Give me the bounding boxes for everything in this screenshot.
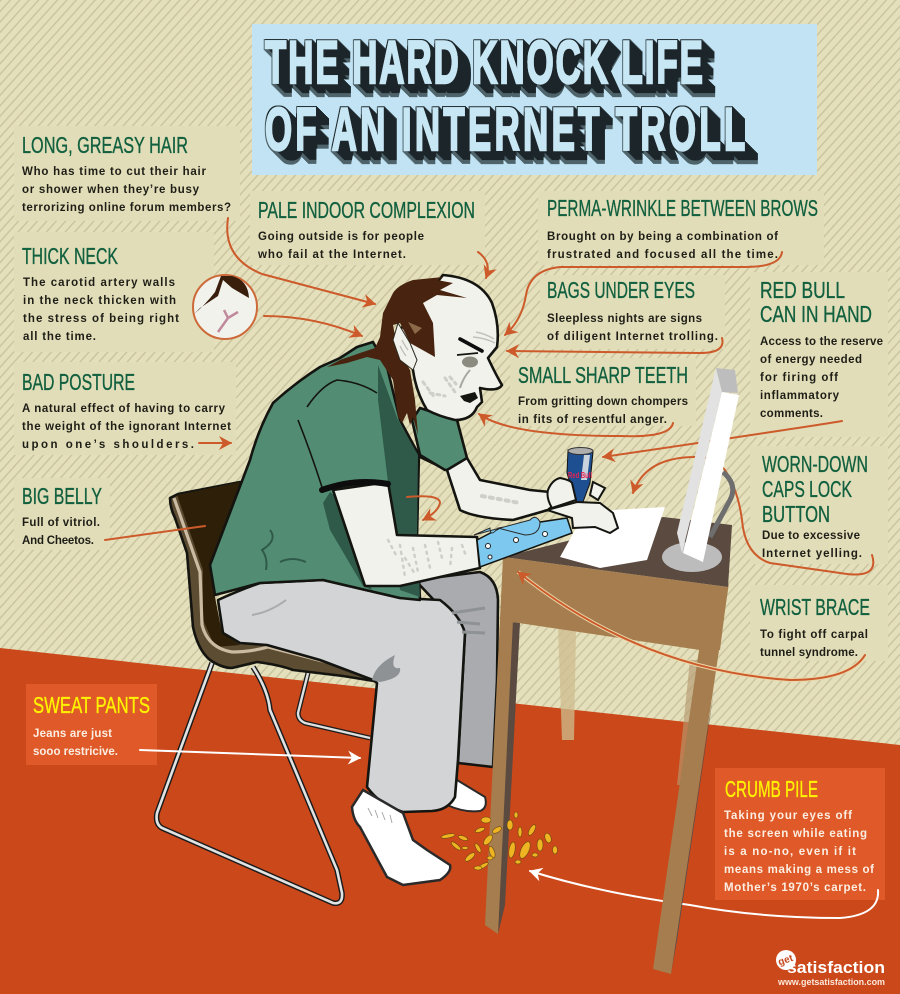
- artery: [218, 310, 238, 332]
- arrow: long greasy hair: [227, 218, 375, 304]
- desk right leg dark edge: [671, 690, 714, 974]
- pants fold: [372, 655, 400, 682]
- sleeve outline: [298, 380, 377, 487]
- panel: thick neck: [14, 232, 214, 352]
- desk left leg: [485, 557, 513, 934]
- near sock: [352, 790, 450, 885]
- near sleeve: [298, 380, 388, 490]
- shirt body: [210, 342, 467, 600]
- body text: Taking your eyes off: [724, 810, 852, 822]
- body text: [547, 313, 718, 343]
- monitor side: [677, 368, 722, 553]
- arrow: pale indoor complexion: [478, 252, 488, 278]
- body text: means making a mess of: [724, 864, 874, 876]
- illustration: chair: [157, 482, 380, 903]
- body text: Internet yelling.: [762, 548, 862, 560]
- keyboard: [560, 507, 665, 568]
- nose line: [460, 370, 470, 388]
- can label: Red Bull: [568, 471, 592, 480]
- panel: crumb pile: [715, 768, 885, 900]
- body text: A natural effect of having to carry: [22, 403, 226, 415]
- heading: SMALL SHARP TEETH: [518, 362, 688, 388]
- logo get: get: [777, 953, 795, 968]
- monitor stand base: [662, 542, 722, 572]
- body text: [257, 231, 424, 261]
- illustration: troll figure: [210, 275, 560, 885]
- monitor front: [683, 392, 739, 562]
- body text: of energy needed: [760, 354, 862, 366]
- pants fold far: [452, 608, 485, 633]
- arrow: sweat pants: [140, 750, 360, 758]
- body text: Who has time to cut their hair: [22, 166, 207, 178]
- chair back inner: [177, 482, 240, 647]
- arrow: big belly to stomach: [407, 496, 440, 520]
- monitor: [677, 368, 739, 562]
- head and neck: [400, 275, 502, 420]
- heading: THICK NECK: [22, 243, 118, 269]
- heading: SWEAT PANTS: [33, 692, 150, 718]
- arrow: bad posture: [199, 442, 231, 444]
- body text: or shower when they’re busy: [22, 184, 200, 196]
- panel: perma-wrinkle: [538, 191, 824, 265]
- body text: Due to excessive: [762, 530, 860, 542]
- monitor top: [716, 368, 738, 393]
- panel: pale indoor complexion: [250, 191, 485, 265]
- heading: BAGS UNDER EYES: [547, 277, 695, 303]
- body text: And Cheetos.: [22, 535, 94, 547]
- body text: Mother’s 1970’s carpet.: [724, 882, 866, 894]
- shirt shadow by arm: [323, 492, 372, 590]
- far sleeve: [412, 408, 467, 470]
- panel: bags under eyes: [540, 275, 725, 349]
- pants thigh crease: [252, 600, 286, 615]
- brace holes: [486, 532, 548, 559]
- panel: wrist brace: [750, 585, 888, 661]
- body text: [23, 277, 179, 343]
- body text: [724, 810, 874, 894]
- arrow: thick neck: [264, 316, 362, 336]
- eye bag: [462, 356, 478, 368]
- crumb pile: [441, 812, 558, 871]
- body text: sooo restricive.: [33, 746, 118, 758]
- body text: [760, 629, 868, 659]
- body text: frustrated and focused all the time.: [547, 249, 778, 261]
- body text: of diligent Internet trolling.: [547, 331, 718, 343]
- far arm hair: [482, 496, 520, 503]
- heading: PALE INDOOR COMPLEXION: [258, 197, 475, 223]
- body text: [762, 530, 862, 560]
- panel: red bull can in hand: [750, 272, 888, 437]
- carpet floor: [0, 648, 900, 994]
- panel: sweat pants: [26, 684, 157, 765]
- body text: Going outside is for people: [258, 231, 424, 243]
- near arm: [333, 482, 480, 586]
- shirt wrinkles: [262, 530, 306, 570]
- body text: upon one’s shoulders.: [22, 439, 194, 451]
- brow wrinkles: [473, 332, 495, 343]
- illustration: desk: [485, 472, 733, 974]
- arrow: red bull can: [603, 421, 842, 457]
- shirt dark front: [378, 365, 420, 597]
- sleeve band: [322, 482, 388, 490]
- body text: the stress of being right: [23, 313, 179, 325]
- eyebrow: [460, 339, 482, 351]
- heading: CRUMB PILE: [725, 776, 818, 802]
- arrow: crumb pile: [530, 871, 878, 918]
- title text with 3D extrusion: OF AN INTERNET TROLL: [265, 97, 745, 163]
- sock ribs: [368, 808, 392, 823]
- far arm: [447, 458, 560, 520]
- body text: in fits of resentful anger.: [518, 414, 667, 426]
- body text: for firing off: [760, 372, 838, 384]
- hair highlight: [408, 322, 422, 334]
- heading: BIG BELLY: [22, 483, 102, 509]
- title text with 3D extrusion: THE HARD KNOCK LIFE: [265, 30, 703, 96]
- desk left leg dark strip: [498, 622, 520, 934]
- eye: [457, 353, 478, 355]
- panel: long greasy hair: [14, 126, 240, 221]
- heading: RED BULL: [760, 277, 845, 303]
- desk top: [503, 517, 732, 587]
- title panel: [252, 24, 817, 175]
- body text: [547, 231, 778, 261]
- body text: To fight off carpal: [760, 629, 868, 641]
- chair shell: [170, 482, 380, 682]
- arrow: perma-wrinkle: [505, 252, 782, 335]
- hand on can: [548, 478, 605, 508]
- neck detail circle: [193, 275, 257, 339]
- ear detail: [400, 340, 408, 356]
- near leg: [218, 580, 465, 812]
- logo badge: [776, 950, 796, 970]
- brace strap: [474, 517, 540, 535]
- body text: [760, 336, 883, 420]
- heading line three: BUTTON: [762, 501, 830, 527]
- body text: [22, 166, 231, 214]
- body text: the screen while eating: [724, 828, 867, 840]
- heading line two: CAPS LOCK: [762, 476, 852, 502]
- logo url: www.getsatisfaction.com: [777, 977, 885, 988]
- mouth: [460, 392, 478, 403]
- arm hair stipple: [388, 540, 466, 577]
- arrow: wrist brace: [518, 572, 865, 680]
- desk right leg: [653, 583, 729, 974]
- body text: Brought on by being a combination of: [547, 231, 778, 243]
- body text: From gritting down chompers: [518, 396, 688, 408]
- arrow: small sharp teeth: [479, 414, 673, 436]
- title text with 3D extrusion: [265, 30, 745, 163]
- body text: Sleepless nights are signs: [547, 313, 702, 325]
- heading: BAD POSTURE: [22, 369, 135, 395]
- desk apron: [503, 557, 728, 650]
- chair tan edge: [174, 498, 330, 663]
- body text: [518, 396, 688, 426]
- can top: [568, 448, 593, 454]
- ear: [393, 323, 417, 370]
- arrow: caps lock button: [633, 457, 873, 575]
- panel: worn-down caps lock button: [750, 446, 888, 564]
- stubble: [423, 377, 456, 398]
- panel: big belly: [14, 478, 110, 550]
- body text: [22, 517, 100, 547]
- body text: all the time.: [23, 331, 96, 343]
- body text: [33, 728, 118, 758]
- hand on keyboard: [547, 502, 618, 533]
- far leg: [415, 572, 498, 767]
- chair front leg frame: [157, 663, 342, 903]
- hair: [327, 277, 467, 435]
- logo wordmark: satisfaction: [787, 958, 885, 977]
- back table legs: [558, 628, 698, 785]
- body text: comments.: [760, 408, 823, 420]
- red bull can: [567, 448, 593, 502]
- monitor cable: [710, 472, 733, 537]
- body text: inflammatory: [760, 390, 840, 402]
- arrow: big belly: [105, 526, 205, 540]
- can highlight: [581, 455, 590, 480]
- far sock: [447, 780, 486, 811]
- body text: The carotid artery walls: [23, 277, 175, 289]
- panel: bad posture: [14, 362, 236, 455]
- body text: is a no-no, even if it: [724, 846, 856, 858]
- hair in circle: [194, 276, 249, 314]
- body text: terrorizing online forum members?: [22, 202, 231, 214]
- panel: small sharp teeth: [510, 358, 696, 426]
- logo: get satisfaction: [776, 950, 885, 988]
- body text: [22, 403, 231, 451]
- brace: [474, 517, 572, 567]
- chair rear leg: [298, 673, 370, 738]
- body text: Jeans are just: [33, 728, 112, 740]
- body text: Full of vitriol.: [22, 517, 100, 529]
- body text: the weight of the ignorant Internet: [22, 421, 231, 433]
- body text: tunnel syndrome.: [760, 647, 858, 659]
- body text: in the neck thicken with: [23, 295, 176, 307]
- body text: who fail at the Internet.: [257, 249, 406, 261]
- arrow: bags under eyes: [507, 338, 723, 353]
- body text: Access to the reserve: [760, 336, 883, 348]
- heading: LONG, GREASY HAIR: [22, 132, 188, 158]
